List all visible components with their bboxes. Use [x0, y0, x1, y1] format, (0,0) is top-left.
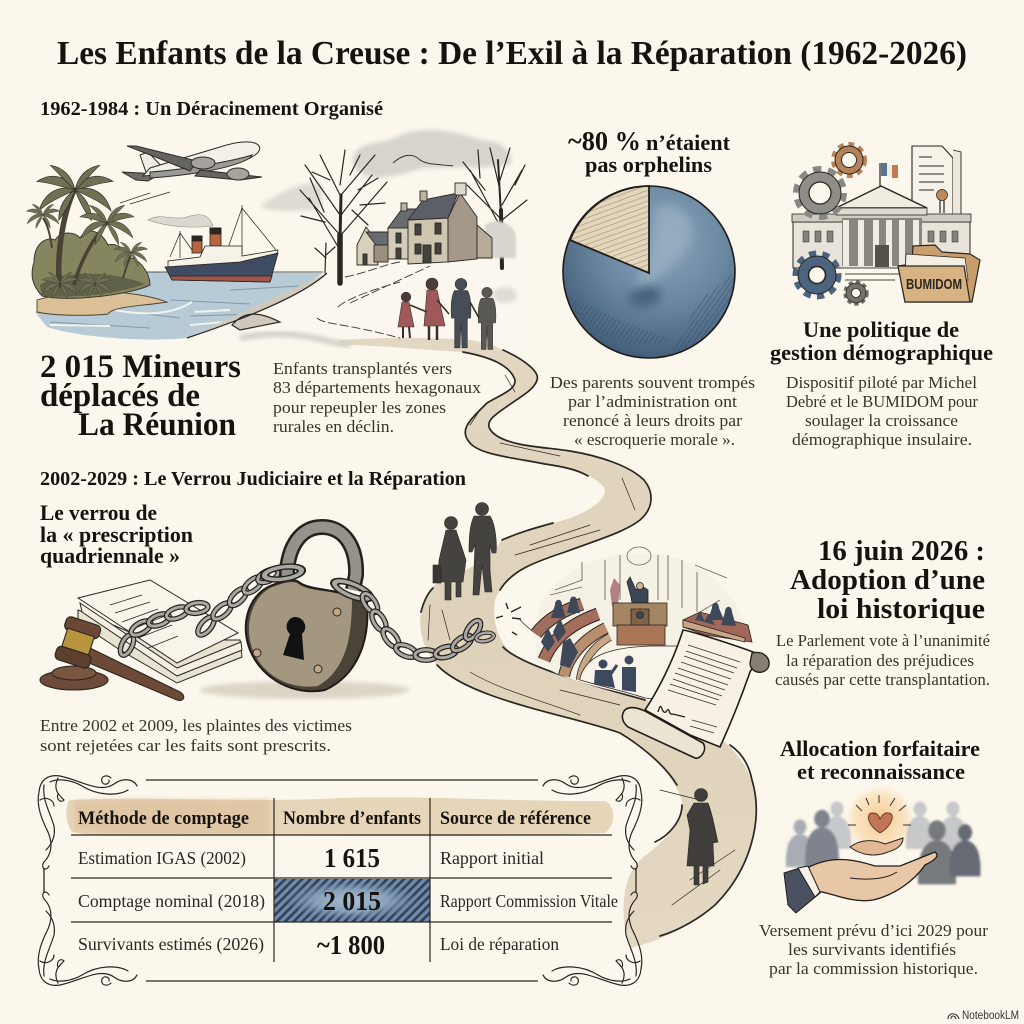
header row	[78, 808, 591, 829]
deputies	[541, 596, 736, 668]
header wash	[66, 797, 613, 836]
highlighted cell	[274, 879, 430, 922]
text: parents trompés: Des parents souvent trompés	[550, 373, 755, 392]
stat: 2 015 mineurs: 2 015 Mineurs	[40, 349, 241, 385]
row: survivants: Loi de réparation	[440, 934, 559, 954]
stat: 2 015 mineurs	[40, 349, 241, 443]
row: nominal	[78, 886, 618, 916]
stone farmhouses	[357, 183, 492, 265]
sunburst	[848, 795, 911, 825]
heading: prescription quadriennale: Le verrou de	[40, 500, 157, 525]
text: plaintes rejetées: sont rejetées car les faits sont prescrits.	[40, 736, 331, 755]
text: parents trompés	[550, 373, 755, 449]
text: enfants transplantés: Enfants transplantés vers	[273, 359, 452, 378]
left benches	[536, 604, 610, 680]
text: dispositif Debré: Dispositif piloté par Michel	[786, 373, 977, 392]
heading: allocation forfaitaire: Allocation forfaitaire	[780, 736, 980, 761]
hillside	[187, 258, 524, 345]
ground shadows	[200, 681, 410, 699]
text: parents trompés: par l’administration ont	[568, 392, 737, 411]
heading: prescription quadriennale: la « prescription	[40, 522, 193, 547]
heading: politique démographique: gestion démographique	[770, 340, 993, 365]
text: versement: par la commission historique.	[769, 959, 978, 978]
heading: 16 juin 2026	[790, 535, 985, 625]
row: nominal: 2 015	[323, 886, 381, 916]
text: dispositif Debré: soulager la croissance	[805, 411, 958, 430]
table: counts	[66, 797, 618, 962]
text: plaintes rejetées: Entre 2002 et 2009, les plaintes des victimes	[40, 716, 352, 735]
family walking	[398, 278, 496, 350]
glow	[842, 782, 918, 858]
right chain, broken end	[359, 591, 494, 660]
text: enfants transplantés	[273, 359, 482, 436]
illustration: rural French countryside	[187, 130, 527, 350]
heading: allocation forfaitaire: et reconnaissance	[797, 759, 965, 784]
left chain	[118, 567, 280, 657]
stat heading: 80 %	[568, 126, 731, 177]
text: versement	[759, 921, 989, 978]
illustration: gavel, papers, padlock and chain	[40, 527, 521, 700]
row: IGAS	[78, 843, 544, 873]
row: nominal: Comptage nominal (2018)	[78, 891, 265, 912]
row: IGAS: Estimation IGAS (2002)	[78, 848, 246, 869]
stat: 2 015 mineurs: déplacés de	[40, 378, 200, 414]
palm trees	[26, 165, 148, 298]
title: Les Enfants de la Creuse : De l’Exil à la Réparation (1962-2026)	[57, 35, 967, 72]
text: Parlement vote	[775, 631, 990, 689]
floor	[580, 646, 690, 700]
foam	[50, 302, 230, 326]
keyhole	[283, 617, 305, 660]
text: enfants transplantés: pour repeupler les zones	[273, 398, 446, 417]
illustration: parliament hemicycle	[535, 547, 752, 700]
stat: 2 015 mineurs: La Réunion	[78, 407, 236, 443]
silhouettes	[786, 802, 981, 884]
break sparks	[496, 603, 521, 635]
table frame	[38, 776, 642, 985]
grid	[71, 798, 612, 962]
text: parents trompés: renoncé à leurs droits par	[563, 411, 743, 430]
row: survivants	[78, 930, 559, 960]
illustration: hands offering heart	[784, 782, 981, 913]
text: versement: Versement prévu d’ici 2029 pour	[759, 921, 989, 940]
flag	[879, 163, 881, 186]
heading: 16 juin 2026: 16 juin 2026 :	[818, 535, 985, 567]
text: Parlement vote: la réparation des préjudices	[786, 651, 974, 670]
stat heading: 80 %: n’étaient	[646, 130, 731, 155]
text: dispositif Debré: Debré et le BUMIDOM pour	[786, 392, 978, 411]
heading: 16 juin 2026: loi historique	[817, 593, 985, 625]
ship	[165, 205, 278, 282]
pie chart: 80 % not orphans	[563, 186, 735, 358]
row: nominal: Rapport Commission Vitale	[440, 891, 618, 911]
text: dispositif Debré: démographique insulaire.	[792, 430, 972, 449]
padlock shackle	[287, 527, 356, 590]
text: plaintes rejetées	[40, 716, 352, 755]
icon: government building, gears and BUMIDOM folder: BUMIDOM	[906, 276, 962, 293]
illustration: signed scroll	[622, 630, 769, 758]
sand beach	[37, 292, 167, 315]
illustration: couple walking on road	[433, 502, 496, 600]
stat heading: 80 %: pas orphelins	[585, 152, 712, 177]
big gray gear	[797, 170, 843, 216]
row: IGAS: Rapport initial	[440, 848, 544, 868]
heading: politique démographique: Une politique de	[803, 317, 959, 342]
text: Parlement vote: causés par cette transplantation.	[775, 670, 990, 689]
text: Parlement vote: Le Parlement vote à l’unanimité	[776, 631, 990, 650]
heading: politique démographique	[770, 317, 993, 365]
headline: 1962-1984: 1962-1984 : Un Déracinement Organisé	[40, 98, 383, 120]
ship smoke	[148, 215, 213, 227]
gavel	[40, 616, 184, 700]
shackle rings	[264, 564, 372, 603]
gray clouds	[353, 130, 511, 177]
small gear	[846, 282, 866, 304]
stack of papers	[78, 580, 242, 683]
header row: Méthode de comptage	[78, 808, 249, 829]
standing figures	[594, 656, 636, 692]
winding road	[340, 330, 756, 948]
text: enfants transplantés: 83 départements hexagonaux	[273, 378, 482, 397]
header row: Source de référence	[440, 808, 591, 829]
text: parents trompés: « escroquerie morale ».	[574, 430, 735, 449]
icon: government building, gears and BUMIDOM folder	[792, 145, 980, 304]
heading: prescription quadriennale	[40, 500, 193, 568]
building	[793, 222, 970, 268]
illustration: tropical island, plane and ship	[26, 142, 323, 340]
water	[35, 272, 323, 340]
heading: 16 juin 2026: Adoption d’une	[790, 564, 985, 596]
heading: prescription quadriennale: quadriennale »	[40, 543, 180, 568]
heading: allocation forfaitaire	[780, 736, 980, 784]
header row: Nombre d’enfants	[283, 808, 421, 829]
text: dispositif Debré	[786, 373, 978, 449]
vegetation	[32, 231, 150, 298]
text: enfants transplantés: rurales en déclin.	[273, 417, 394, 436]
headline: 2002-2029: 2002-2029 : Le Verrou Judiciaire et la Réparation	[40, 468, 466, 490]
row: survivants: ~1 800	[317, 930, 385, 960]
blue gear	[796, 254, 838, 296]
text: versement: les survivants identifiés	[788, 940, 956, 959]
large hand	[807, 852, 937, 901]
row: survivants: Survivants estimés (2026)	[78, 934, 264, 955]
sleeve	[784, 868, 820, 913]
small hand	[850, 838, 903, 855]
plane	[120, 142, 262, 204]
beige slice	[570, 186, 649, 273]
right benches	[683, 612, 752, 642]
document	[912, 146, 953, 217]
water ripples	[50, 286, 300, 328]
row: IGAS: 1 615	[324, 843, 380, 873]
orange gear	[834, 145, 864, 175]
heart	[868, 813, 892, 833]
folder	[898, 245, 980, 302]
illustration: lone figure on road	[687, 788, 718, 885]
podium and speaker	[613, 577, 667, 645]
padlock body	[246, 580, 367, 691]
bare trees	[300, 148, 527, 283]
stat heading: 80 %: ~80 %	[568, 126, 641, 156]
bush behind farm	[485, 221, 516, 258]
